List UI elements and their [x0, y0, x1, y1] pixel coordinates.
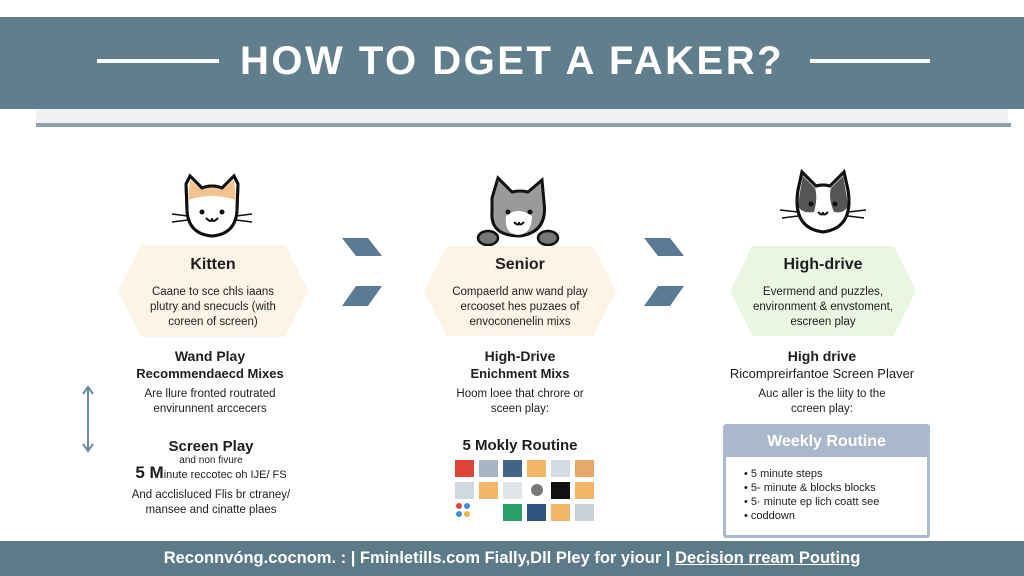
panel: kitten hexagon: coreen of screen) [168, 316, 258, 328]
heading: weekly routine [726, 427, 927, 457]
panel: weekly routine box [723, 424, 930, 538]
arrow: 2 [644, 238, 684, 306]
list: routine steps: • 5· minute ep lich coatt see [744, 496, 879, 508]
text: screen play [132, 438, 290, 516]
text: screen play: And acclisluced Flis br ctraney/ [132, 489, 290, 501]
text: screen play: and non fivure [179, 455, 243, 466]
panel: senior hexagon: Senior [495, 256, 545, 273]
panel: senior hexagon [424, 246, 616, 336]
heading: weekly routine: Weekly Routine [767, 433, 886, 450]
text: screen play: Screen Play [168, 438, 254, 455]
arrow: vertical double [82, 385, 94, 453]
text: high-drive recommendations [730, 348, 914, 415]
panel: senior hexagon: Compaerld anw wand play [452, 286, 588, 298]
text: high-drive recommendations: Ricompreirfantoe Screen Plaver [730, 366, 914, 381]
panel: kitten hexagon [118, 245, 308, 337]
panel: senior hexagon: envoconenelin mixs [469, 316, 570, 328]
text: senior recommendations: Enichment Mixs [471, 366, 569, 381]
text: kitten recommendations: envirunnent arccecers [153, 403, 267, 415]
header band [0, 17, 1024, 109]
panel: high-drive hexagon: High-drive [783, 256, 863, 273]
panel: kitten hexagon: plutry and snecucls (with [150, 301, 276, 313]
text: senior recommendations [456, 348, 584, 415]
panel: senior hexagon: ercooset hes puzaes of [461, 301, 579, 313]
panel: kitten hexagon: Caane to sce chls iaans [152, 286, 274, 298]
text: screen play: 5 Minute reccotec oh IJE/ FS [135, 463, 287, 482]
text: kitten recommendations [136, 348, 284, 415]
icon: kitten [172, 174, 252, 238]
title: HOW TO DGET A FAKER? [240, 39, 784, 83]
panel: kitten hexagon: Kitten [190, 256, 236, 273]
text: senior recommendations: Hoom loee that chrore or [456, 388, 584, 400]
text: screen play: mansee and cinatte plaes [145, 504, 277, 516]
list: routine steps: • coddown [744, 510, 795, 522]
list: routine steps: • 5- minute & blocks blocks [744, 482, 876, 494]
text: high-drive recommendations: Auc aller is the liity to the [758, 388, 886, 400]
icon: senior cat [476, 175, 560, 246]
text: high-drive recommendations: High drive [788, 348, 856, 364]
text: senior recommendations: High-Drive [485, 348, 555, 364]
panel: high-drive hexagon: environment & envstoment, [753, 301, 893, 313]
heading: 5 weekly routine: 5 Mokly Routine [462, 437, 578, 454]
arrow: 1 [342, 238, 382, 306]
panel: high-drive hexagon: escreen play [790, 316, 856, 328]
text: kitten recommendations: Are llure fronted routrated [144, 388, 276, 400]
text: kitten recommendations: Recommendaecd Mixes [136, 366, 284, 381]
text: kitten recommendations: Wand Play [175, 348, 245, 364]
text: high-drive recommendations: ccreen play: [791, 403, 853, 415]
footer: Reconnvóng.cocnom. : | Fminletills.com Fially,Dll Pley for yiour | Decision rream Pouting [164, 549, 860, 567]
list: routine steps: • 5 minute steps [744, 468, 822, 480]
icon grid [455, 460, 594, 521]
list: routine steps [744, 468, 879, 522]
panel: high-drive hexagon [730, 246, 916, 336]
panel: high-drive hexagon: Evermend and puzzles, [763, 286, 883, 298]
footer [0, 541, 1024, 576]
icon: high-drive cat [780, 169, 866, 234]
text: senior recommendations: sceen play: [491, 403, 549, 415]
